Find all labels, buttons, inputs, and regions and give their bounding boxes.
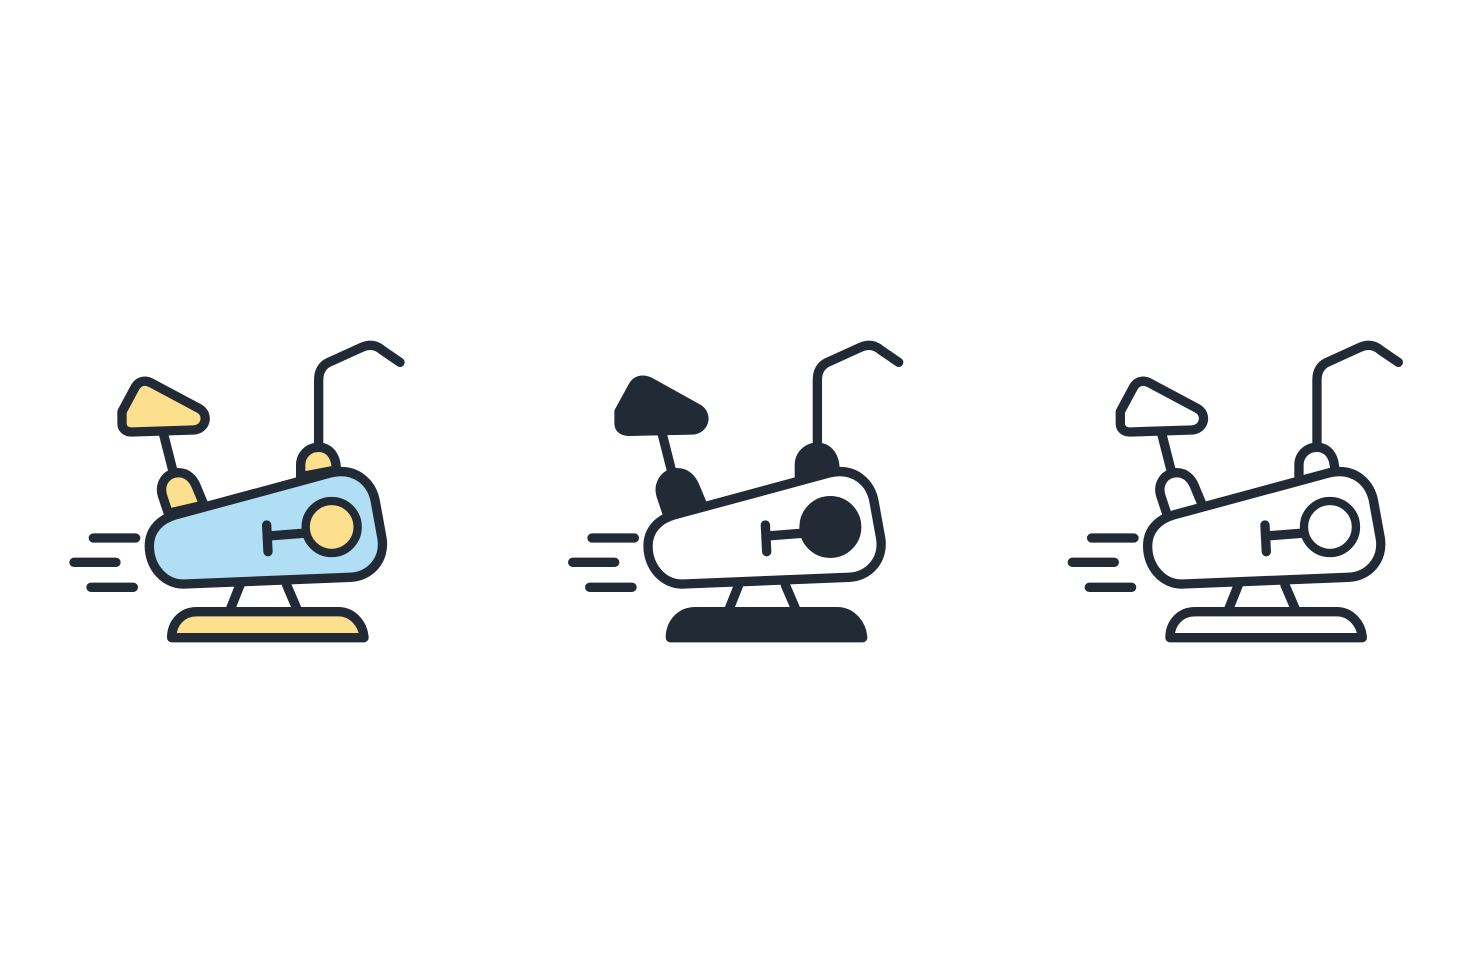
flywheel	[1304, 501, 1356, 553]
speed lines	[573, 538, 634, 587]
speed lines	[1072, 538, 1134, 587]
front hump	[799, 447, 835, 477]
front hump	[301, 447, 336, 477]
support legs	[231, 585, 297, 608]
saddle	[619, 380, 704, 431]
icon: exercise bike, outline	[1072, 345, 1398, 638]
flywheel	[306, 501, 358, 553]
rear hump	[1160, 473, 1202, 513]
handlebar	[1317, 345, 1398, 445]
support legs	[1229, 585, 1295, 608]
handlebar	[817, 345, 899, 445]
crank	[765, 525, 801, 552]
rear hump	[162, 473, 204, 513]
seat post	[662, 433, 671, 470]
crank	[267, 525, 303, 552]
base	[1170, 612, 1362, 638]
front hump	[1299, 447, 1335, 477]
body	[648, 472, 881, 584]
saddle	[122, 381, 205, 432]
base	[172, 612, 364, 638]
handlebar	[319, 345, 400, 445]
seat post	[163, 433, 173, 470]
icon: exercise bike, solid	[573, 345, 899, 638]
body	[1148, 472, 1381, 584]
rear hump	[660, 473, 703, 513]
seat post	[1162, 433, 1171, 470]
crank	[1265, 525, 1301, 552]
flywheel	[804, 501, 857, 553]
support legs	[729, 585, 795, 608]
base	[670, 612, 863, 638]
saddle	[1120, 381, 1203, 432]
speed lines	[74, 538, 136, 587]
body	[149, 472, 382, 584]
icon: exercise bike, coloured	[74, 345, 400, 638]
